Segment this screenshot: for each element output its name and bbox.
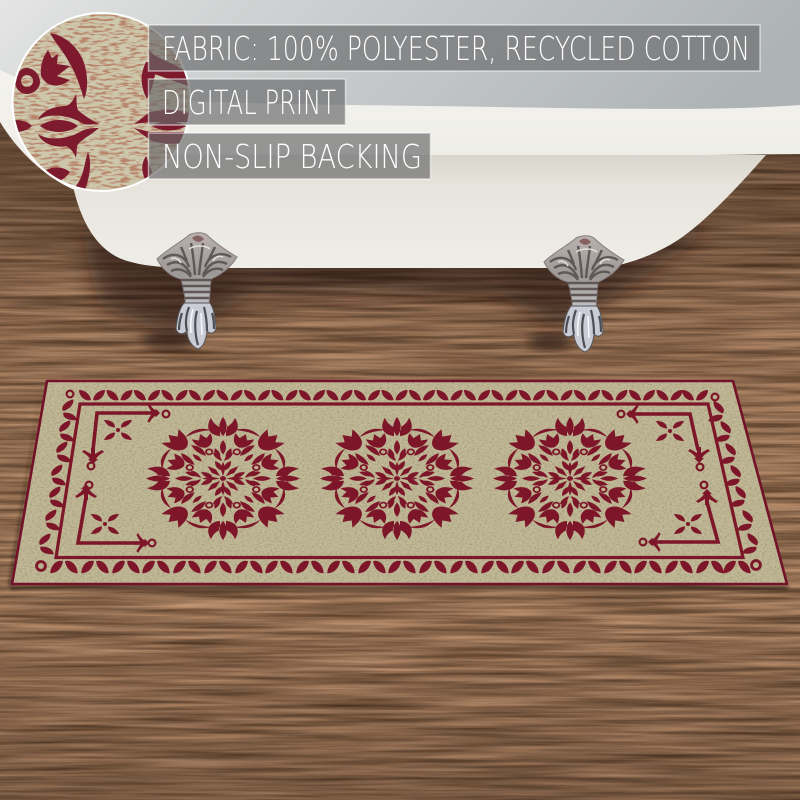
bottom leaf border (50, 561, 751, 573)
rug base (12, 381, 787, 584)
bottom-right corner ornament (640, 482, 718, 552)
top-right corner ornament (618, 404, 710, 470)
rug (8, 379, 790, 590)
close-up base (10, 10, 194, 194)
left medallion (146, 417, 300, 540)
fabric close-up circle (10, 10, 194, 194)
feature label: print: DIGITAL PRINT (162, 83, 336, 122)
right medallion (493, 417, 647, 540)
feature label: print (148, 79, 346, 125)
bathtub (0, 70, 800, 268)
top leaf border (79, 390, 708, 400)
close-up motif (15, 33, 190, 192)
bottom-left corner ornament (75, 482, 155, 553)
top-left corner ornament (82, 403, 169, 469)
left claw foot (142, 233, 237, 350)
rug corner rings (37, 391, 760, 570)
tub body (70, 150, 766, 268)
rug weave texture (10, 379, 790, 586)
close-up ring (12, 13, 190, 191)
rug shadow (8, 384, 790, 590)
wall: tub interior background (0, 0, 800, 160)
centre medallion (320, 417, 474, 540)
floor shadow under tub (80, 225, 720, 340)
tub rim (0, 70, 800, 190)
close-up weave (10, 10, 194, 194)
right claw foot (528, 236, 624, 352)
feature label: backing: NON-SLIP BACKING (162, 137, 422, 176)
inner frame line (56, 404, 743, 558)
right leaf border (708, 401, 760, 556)
left leaf border (38, 400, 77, 556)
